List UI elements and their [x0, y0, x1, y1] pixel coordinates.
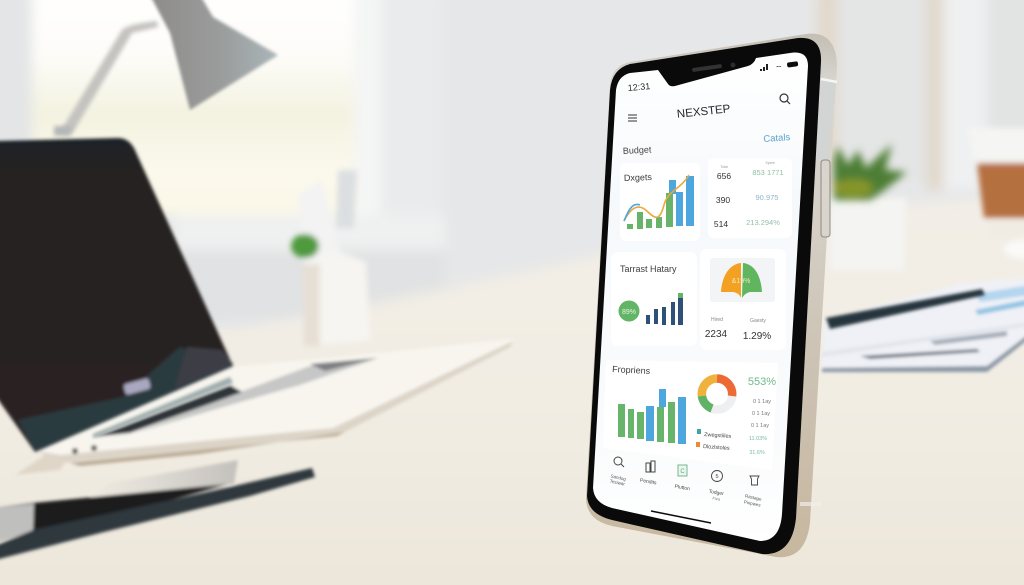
nav item: search — [609, 457, 627, 487]
phone metal frame — [586, 34, 837, 557]
menu icon — [628, 115, 637, 121]
right plant pot — [831, 144, 907, 270]
nav item: pendits — [639, 461, 657, 487]
right figures: 31.6% — [749, 450, 765, 456]
laptop screen — [0, 138, 233, 452]
card: budget figures: 514 — [714, 219, 728, 229]
nav item: platform — [674, 465, 691, 492]
bar chart — [624, 175, 694, 229]
card: transaction history: Tarrast Hatary — [620, 264, 677, 274]
documents and pen — [822, 278, 1024, 372]
right figures: 0 1 1ay — [751, 423, 769, 429]
card: budget figures: 213.294% — [746, 218, 780, 227]
right figures — [749, 399, 771, 456]
right figures: 11.03% — [749, 436, 767, 442]
home indicator — [651, 511, 711, 523]
card: budgets chart — [620, 163, 700, 241]
legend: Dlozlstoles — [703, 444, 730, 452]
card: budgets chart: Dxgets — [624, 172, 653, 183]
status bar — [627, 61, 798, 93]
search icon — [780, 94, 790, 104]
status bar: ⌔ — [775, 64, 783, 73]
laptop base — [15, 339, 513, 475]
card: gauge: 1.29% — [743, 331, 771, 342]
card: gauge: Gaesty — [750, 318, 766, 324]
app title: NEXSTEP — [676, 103, 731, 121]
phone notch speaker — [692, 62, 736, 72]
phone bezel — [587, 38, 821, 554]
details link: Catals — [763, 132, 791, 145]
nav item: platform: C — [680, 469, 685, 475]
card: budget figures: Total — [720, 165, 728, 169]
nav item: search: Sandog — [610, 473, 627, 482]
left plant pot with pens — [291, 170, 370, 346]
budget heading: Budget — [623, 144, 652, 156]
nav item: todger: Fiva — [712, 495, 721, 502]
card: transaction history — [611, 252, 697, 346]
phone highlights — [800, 79, 837, 506]
card: budget figures: 90.975 — [756, 193, 778, 202]
nav item: todger: 5 — [715, 474, 719, 480]
bottom navigation — [609, 457, 763, 508]
nav item: plantage — [743, 476, 763, 508]
tablet and stylus — [0, 460, 315, 560]
legend: Zwegstiiles — [704, 432, 732, 440]
nav item: todger — [708, 470, 725, 502]
nav item: todger: Todger — [708, 489, 725, 497]
progress circle: 89% — [622, 309, 636, 316]
card: projections: Fropriens — [612, 364, 651, 376]
donut chart — [702, 378, 732, 410]
card: budget figures: 656 — [717, 171, 731, 181]
card: projections — [603, 360, 778, 470]
phone screen — [593, 53, 808, 541]
background: wall and window — [0, 0, 1024, 330]
card: budget figures — [708, 158, 792, 238]
gauge chart: &19% — [732, 278, 750, 285]
laptop — [0, 138, 513, 475]
right figures: 0 1 1ay — [753, 399, 771, 405]
card: gauge — [700, 249, 786, 350]
card: gauge: 2234 — [705, 329, 728, 340]
phone — [586, 34, 837, 557]
nav item: plantage: Piopwes — [743, 499, 762, 508]
background: desk surface — [0, 195, 1024, 585]
status bar: 12:31 — [627, 81, 651, 93]
card: budget figures: Spent — [765, 161, 775, 165]
legend — [696, 429, 732, 452]
right figures: 0 1 1ay — [752, 411, 770, 417]
desk lamp — [54, 0, 278, 136]
nav item: plantage: Rastage — [745, 493, 763, 502]
navy bars — [646, 293, 683, 325]
nav item: platform: Plutton — [674, 484, 691, 492]
coffee cup — [968, 128, 1024, 259]
card: projections: 553% — [748, 376, 776, 388]
card: budget figures: 390 — [716, 195, 730, 205]
bar chart with two series — [618, 389, 686, 444]
card: gauge: Hired — [711, 317, 723, 323]
nav item: pendits: Pendits — [639, 478, 657, 487]
card: budget figures: 853 1771 — [752, 168, 784, 177]
nav item: search: Tesiwar — [609, 479, 626, 487]
